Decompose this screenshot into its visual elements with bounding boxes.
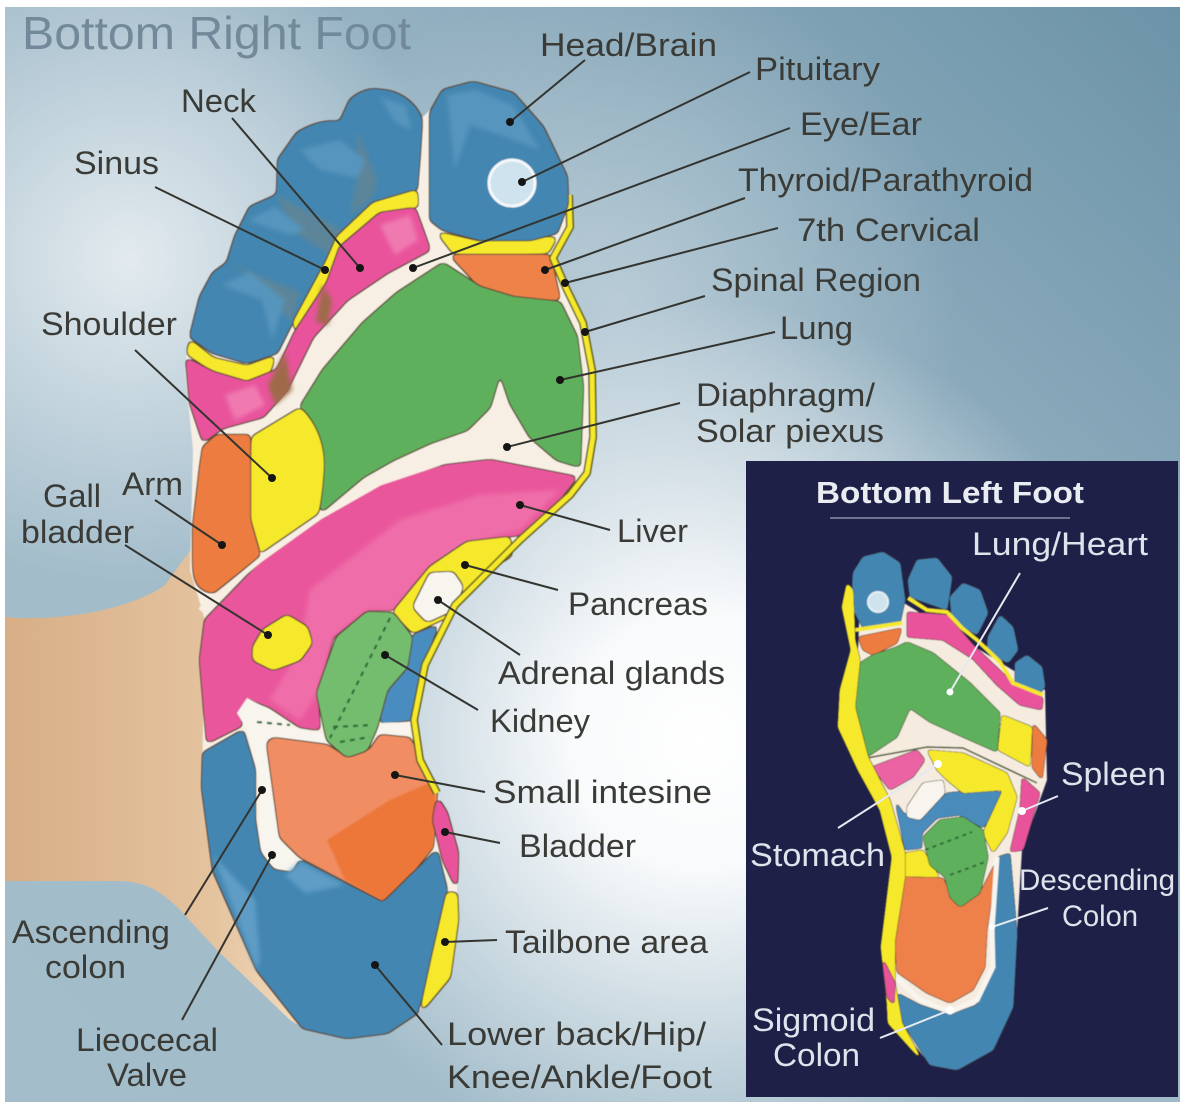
labels: Shoulder [41, 306, 177, 342]
arm [193, 435, 260, 593]
labels: Pancreas [568, 586, 708, 622]
inset spine [838, 583, 923, 1062]
toe shading [227, 130, 377, 322]
inset right orange [1032, 723, 1047, 780]
labels: Solar piexus [696, 413, 884, 449]
labels: Liver [617, 513, 688, 549]
labels: Adrenal glands [498, 655, 725, 691]
inset pink band [907, 612, 1043, 710]
orange thyroid [450, 255, 560, 300]
labels: Neck [181, 83, 257, 119]
panel heading: Bottom Left Foot [816, 475, 1084, 510]
labels: Lower back/Hip/ [447, 1016, 706, 1052]
inset labels: Lung/Heart [972, 526, 1148, 562]
inset central yellow [927, 750, 1017, 853]
inset kidney dashes [925, 832, 985, 875]
inset orange [895, 860, 997, 1003]
gall bladder [253, 615, 312, 670]
inset thyroid [858, 628, 902, 655]
big toe highlight [447, 90, 540, 170]
panel: bottom left foot [746, 461, 1178, 1097]
inset labels: Sigmoid [752, 1002, 875, 1038]
labels: Eye/Ear [800, 106, 922, 142]
inset left pink [882, 957, 895, 1005]
labels: bladder [21, 514, 134, 550]
labels: Lieocecal [76, 1022, 218, 1058]
inset toes [852, 552, 1045, 693]
labels: Spinal Region [711, 262, 921, 298]
inset diagonal [867, 747, 1037, 783]
spine edge [414, 195, 593, 793]
small toes [190, 89, 422, 363]
labels: Small intesine [493, 774, 712, 810]
sinus and neck pink band [186, 208, 430, 442]
labels: Tailbone area [505, 924, 708, 960]
inset labels: Colon [773, 1037, 860, 1073]
lighter liver patch [270, 490, 560, 720]
inset labels [750, 526, 1175, 1073]
inset dots [934, 688, 1026, 1014]
inset foot [838, 552, 1047, 1070]
labels: Ascending [12, 914, 170, 950]
labels: Valve [107, 1057, 187, 1093]
inset rim [897, 857, 997, 1012]
inset pituitary [868, 592, 888, 612]
inset base [850, 590, 1047, 1070]
inset lung [855, 642, 1000, 757]
labels: 7th Cervical [797, 212, 980, 248]
main foot [185, 82, 593, 1038]
pink highlights and brown shade [225, 215, 418, 420]
inset labels: Spleen [1061, 756, 1166, 792]
tailbone [420, 892, 458, 1013]
inset labels: Stomach [750, 837, 885, 873]
labels: Knee/Ankle/Foot [447, 1059, 712, 1095]
inset kidney [923, 817, 988, 907]
labels: Sinus [74, 145, 159, 181]
inset leader lines [838, 573, 1058, 1038]
heel highlights [213, 855, 345, 970]
foot base [185, 110, 593, 1038]
pancreas [393, 537, 512, 633]
labels: Arm [122, 466, 183, 502]
lung [300, 263, 583, 513]
inset labels: Descending [1019, 864, 1175, 897]
heel [202, 730, 447, 1038]
liver and pink zone [200, 460, 577, 743]
kidney dashes [257, 618, 390, 742]
inset lower yellow [905, 850, 940, 878]
inset right yellow [998, 715, 1032, 767]
inset blue middle [895, 790, 1008, 850]
labels: Kidney [490, 703, 590, 739]
labels: Lung [780, 310, 853, 346]
pituitary [489, 160, 535, 206]
labels: Pituitary [755, 51, 880, 87]
adrenal [413, 572, 463, 622]
toe highlights [222, 97, 412, 340]
white strip [237, 698, 410, 873]
diagonal stripe [200, 463, 440, 610]
bladder [433, 797, 458, 890]
leg [5, 548, 303, 1028]
leader lines [125, 60, 790, 1045]
inset heel [897, 853, 1017, 1070]
labels: Gall [43, 478, 101, 514]
inset white [907, 780, 945, 820]
spine edge fill [414, 195, 593, 793]
intestine dark part [327, 780, 436, 903]
inset stomach pink [872, 750, 925, 790]
inset toe yellow [855, 598, 1043, 695]
blue arch [380, 625, 438, 723]
inset labels: Colon [1062, 900, 1138, 933]
title: Bottom Right Foot [22, 7, 411, 59]
big toe [430, 82, 568, 240]
small intestine [267, 735, 437, 903]
labels: colon [45, 949, 126, 985]
kidney [317, 612, 412, 757]
yellow toe bands [187, 190, 557, 381]
leader dots [218, 118, 589, 969]
labels: Diaphragm/ [696, 377, 875, 413]
shoulder [250, 408, 324, 553]
labels: Bladder [519, 828, 636, 864]
labels: Head/Brain [540, 27, 717, 63]
labels: Thyroid/Parathyroid [738, 162, 1033, 198]
inset right pink [1010, 777, 1040, 852]
